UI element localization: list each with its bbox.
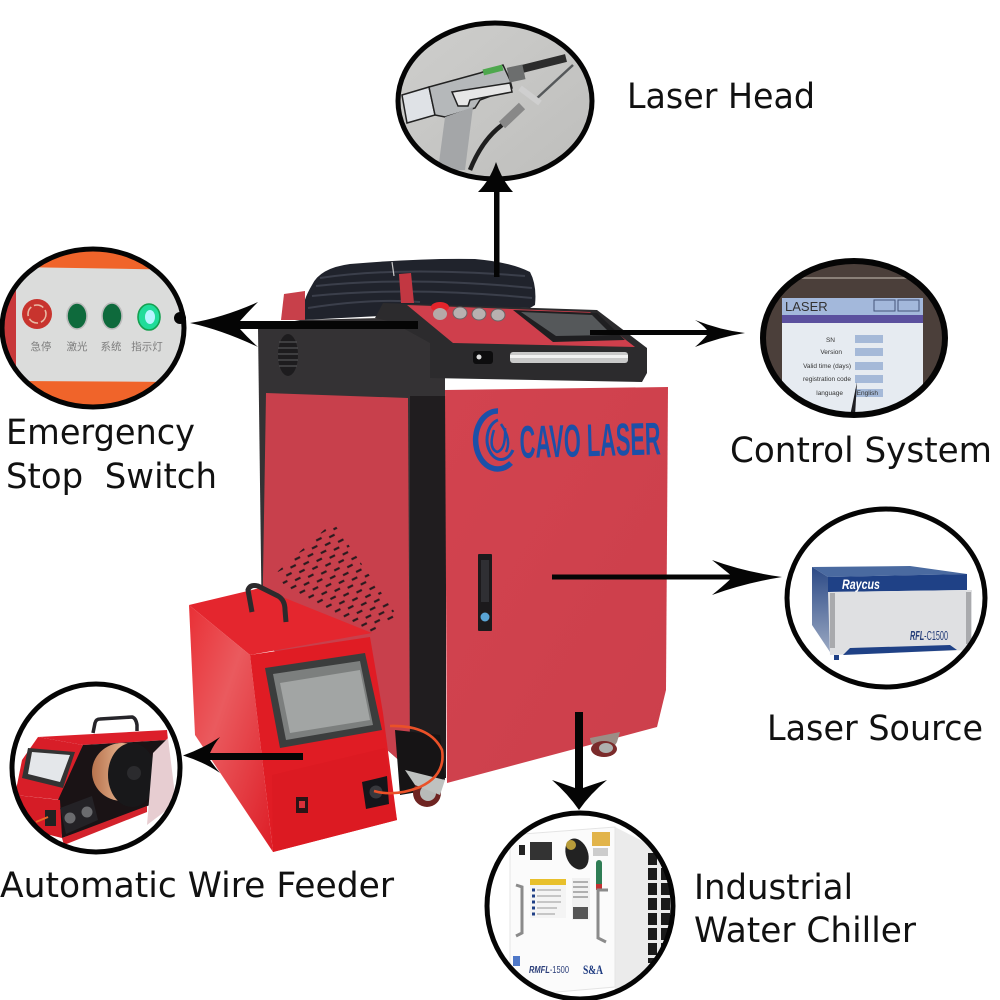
cable connector bbox=[362, 776, 389, 809]
circle: automatic wire feeder bbox=[8, 680, 184, 856]
label: Automatic Wire Feeder: Automatic Wire Feeder bbox=[0, 866, 395, 906]
left caster bbox=[405, 770, 445, 807]
black cabinet body bbox=[258, 318, 445, 780]
settings labels: language bbox=[816, 390, 843, 397]
power switch bbox=[296, 797, 308, 813]
settings labels bbox=[803, 337, 878, 397]
touch screen bbox=[513, 310, 625, 342]
carry handle bbox=[248, 586, 286, 622]
red top plate bbox=[407, 305, 635, 347]
handles bbox=[516, 885, 522, 936]
model text: RMFL-1500 bbox=[529, 964, 569, 976]
circle: industrial water chiller bbox=[485, 810, 680, 1000]
settings fields bbox=[855, 335, 883, 397]
circle: laser source bbox=[785, 508, 987, 688]
lamp captions: 指示灯 bbox=[131, 340, 163, 353]
label: Emergency Stop Switch bbox=[6, 413, 217, 497]
outlet bbox=[45, 810, 56, 826]
red cabinet door bbox=[445, 387, 668, 783]
door latch bbox=[478, 554, 492, 631]
circle: laser head bbox=[396, 20, 594, 182]
CAVO LASER logo bbox=[476, 411, 661, 469]
circle: laser source: Raycus bbox=[842, 576, 880, 592]
arrow: to emergency stop bbox=[190, 302, 418, 347]
side door bbox=[147, 738, 176, 825]
arrow: to laser source bbox=[552, 560, 782, 595]
arrow: to wire feeder bbox=[183, 737, 303, 773]
lamp captions: 激光 bbox=[66, 340, 88, 353]
settings labels: Valid time (days) bbox=[803, 363, 851, 370]
arrow: to control system bbox=[590, 320, 745, 347]
side lock bbox=[473, 351, 493, 364]
red rear bracket bbox=[281, 291, 305, 320]
label: Control System: Control System bbox=[730, 431, 992, 471]
circle: control system: LASER bbox=[785, 299, 828, 314]
cable bundle bbox=[302, 259, 535, 320]
label: Emergency Stop Switch: Emergency bbox=[6, 413, 195, 453]
chiller controls bbox=[519, 832, 610, 890]
silver handle bbox=[510, 352, 628, 363]
main welding machine bbox=[189, 259, 668, 852]
settings labels: Version bbox=[820, 349, 842, 356]
arrow: to laser head bbox=[478, 162, 513, 277]
black front pillar bbox=[410, 396, 446, 778]
infographic canvas: CAVO LASER bbox=[519, 412, 661, 468]
label: Laser Head: Laser Head bbox=[627, 77, 815, 117]
indicator lamps bbox=[67, 303, 160, 330]
right caster bbox=[590, 732, 620, 757]
label: Laser Source: Laser Source bbox=[767, 709, 983, 749]
lamp captions: 系统 bbox=[100, 340, 122, 353]
stop button bbox=[22, 299, 52, 329]
circle: laser source: RFL-C1500 bbox=[910, 628, 948, 643]
drive rollers bbox=[60, 796, 98, 834]
orange cable bbox=[374, 726, 443, 793]
settings labels: SN bbox=[826, 337, 835, 344]
speaker grille bbox=[278, 334, 298, 376]
wire spool bbox=[92, 743, 141, 801]
emergency stop knob bbox=[431, 302, 449, 320]
spec label with QR bbox=[572, 878, 590, 920]
arrow: to water chiller bbox=[552, 712, 607, 810]
indicator knobs bbox=[453, 307, 505, 321]
label: Industrial Water Chiller bbox=[694, 868, 917, 951]
label: Emergency Stop Switch: Stop Switch bbox=[6, 457, 217, 497]
brand text: S&A bbox=[583, 962, 603, 977]
left red side panel bbox=[262, 393, 410, 770]
control console bbox=[375, 302, 647, 382]
feeder screen bbox=[265, 653, 382, 748]
shadow behind feeder bbox=[395, 730, 445, 795]
label: Industrial Water Chiller: Industrial bbox=[694, 868, 853, 908]
label: Industrial Water Chiller: Water Chiller bbox=[694, 911, 917, 951]
wire feeder unit bbox=[189, 586, 443, 852]
safety card bbox=[530, 879, 566, 918]
circle: emergency stop switch bbox=[0, 245, 190, 410]
lamp captions: 急停 bbox=[30, 340, 52, 353]
vent holes bbox=[278, 526, 394, 632]
lamp captions bbox=[31, 341, 162, 352]
settings labels: registration code bbox=[803, 376, 851, 383]
circle: control system bbox=[760, 258, 950, 418]
settings labels: English bbox=[857, 390, 878, 397]
